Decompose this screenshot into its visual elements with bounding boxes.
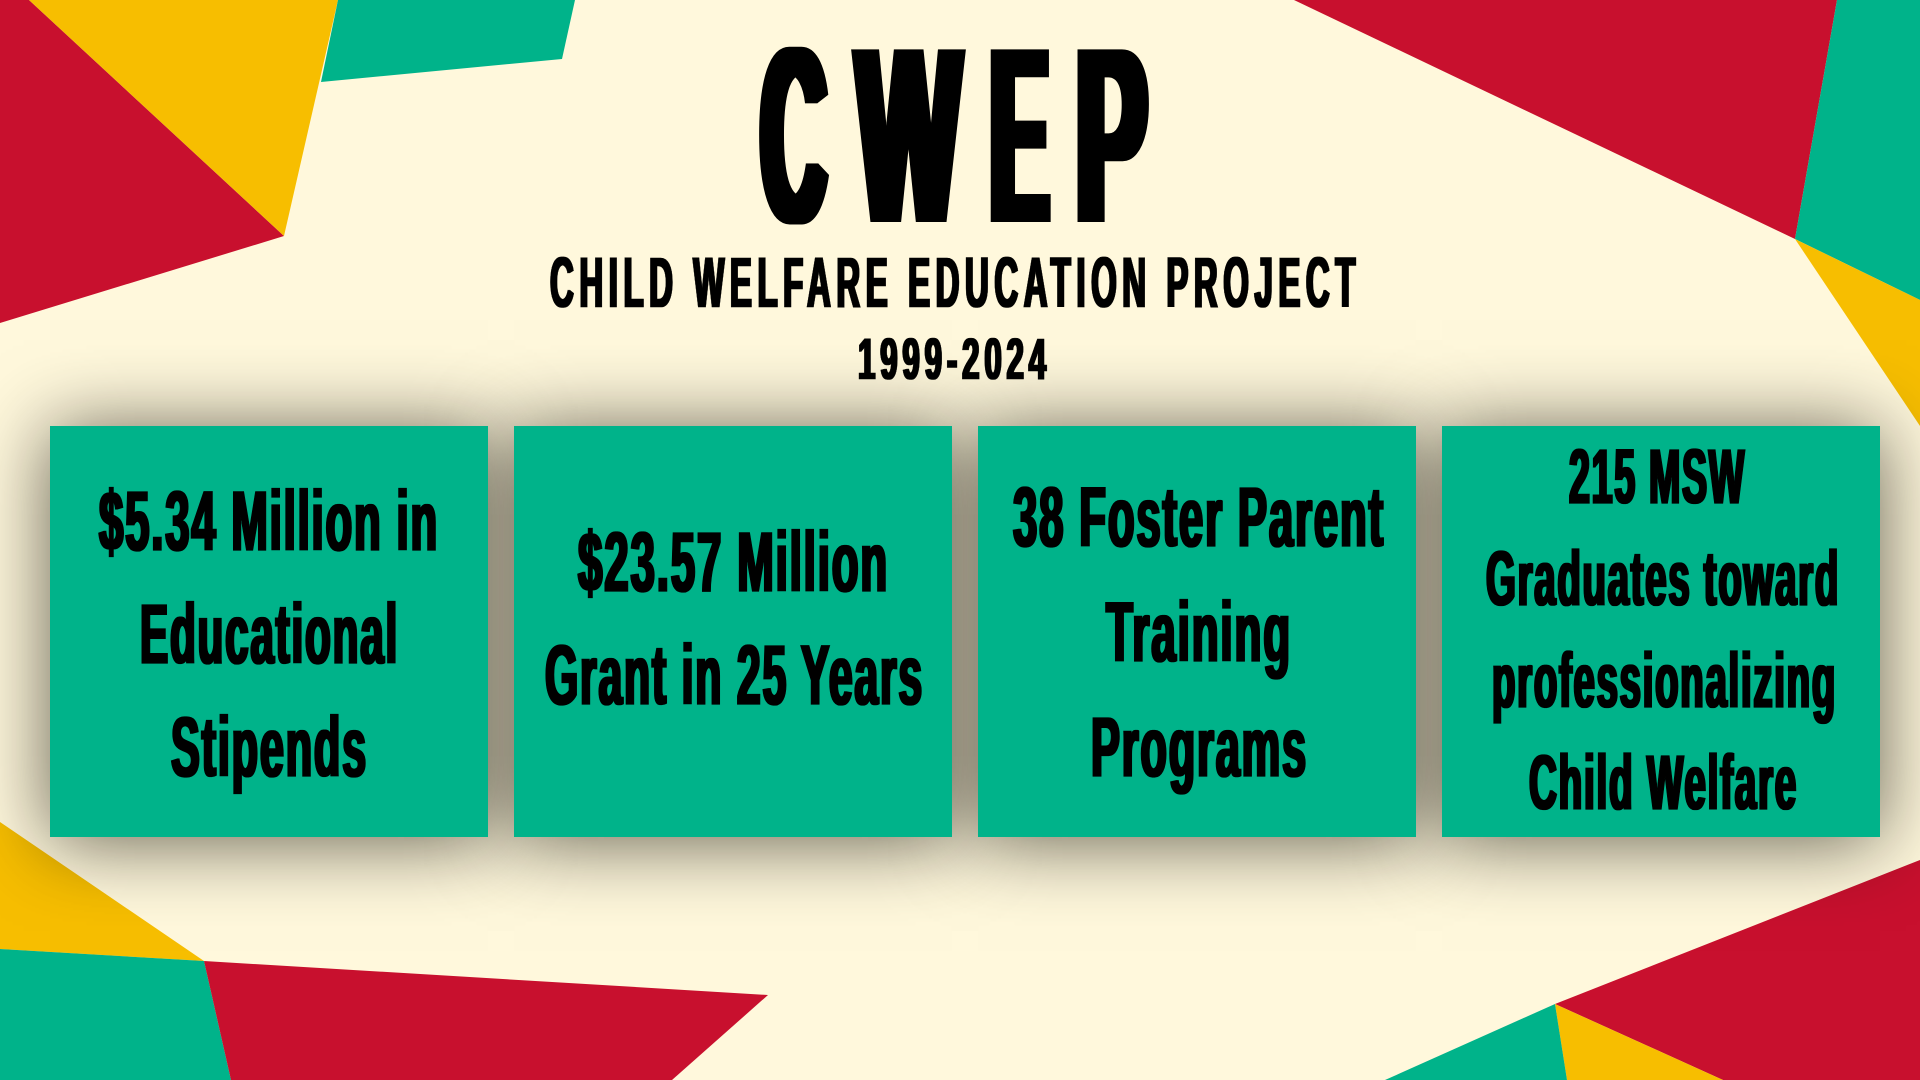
top-right shapes [1294,0,1920,426]
title: CWEP: C [762,0,826,276]
stat text [1486,434,1840,826]
bottom-right shapes [1385,860,1920,1080]
top-left shapes [0,0,575,323]
title block: P [1076,0,1146,276]
stat text [99,474,439,794]
title: CWEP: W [857,0,960,276]
stat text [1013,470,1385,794]
panel: MSW graduates [1442,426,1880,837]
title: CWEP [762,0,1146,276]
date range: 1999-2024 [858,327,1051,392]
title: CWEP: E [991,0,1048,276]
stat text [545,515,924,722]
panel: grant total [514,426,952,837]
panel: educational stipends [50,426,488,837]
panel: foster parent training [978,426,1416,837]
bottom-left shapes [0,822,768,1080]
